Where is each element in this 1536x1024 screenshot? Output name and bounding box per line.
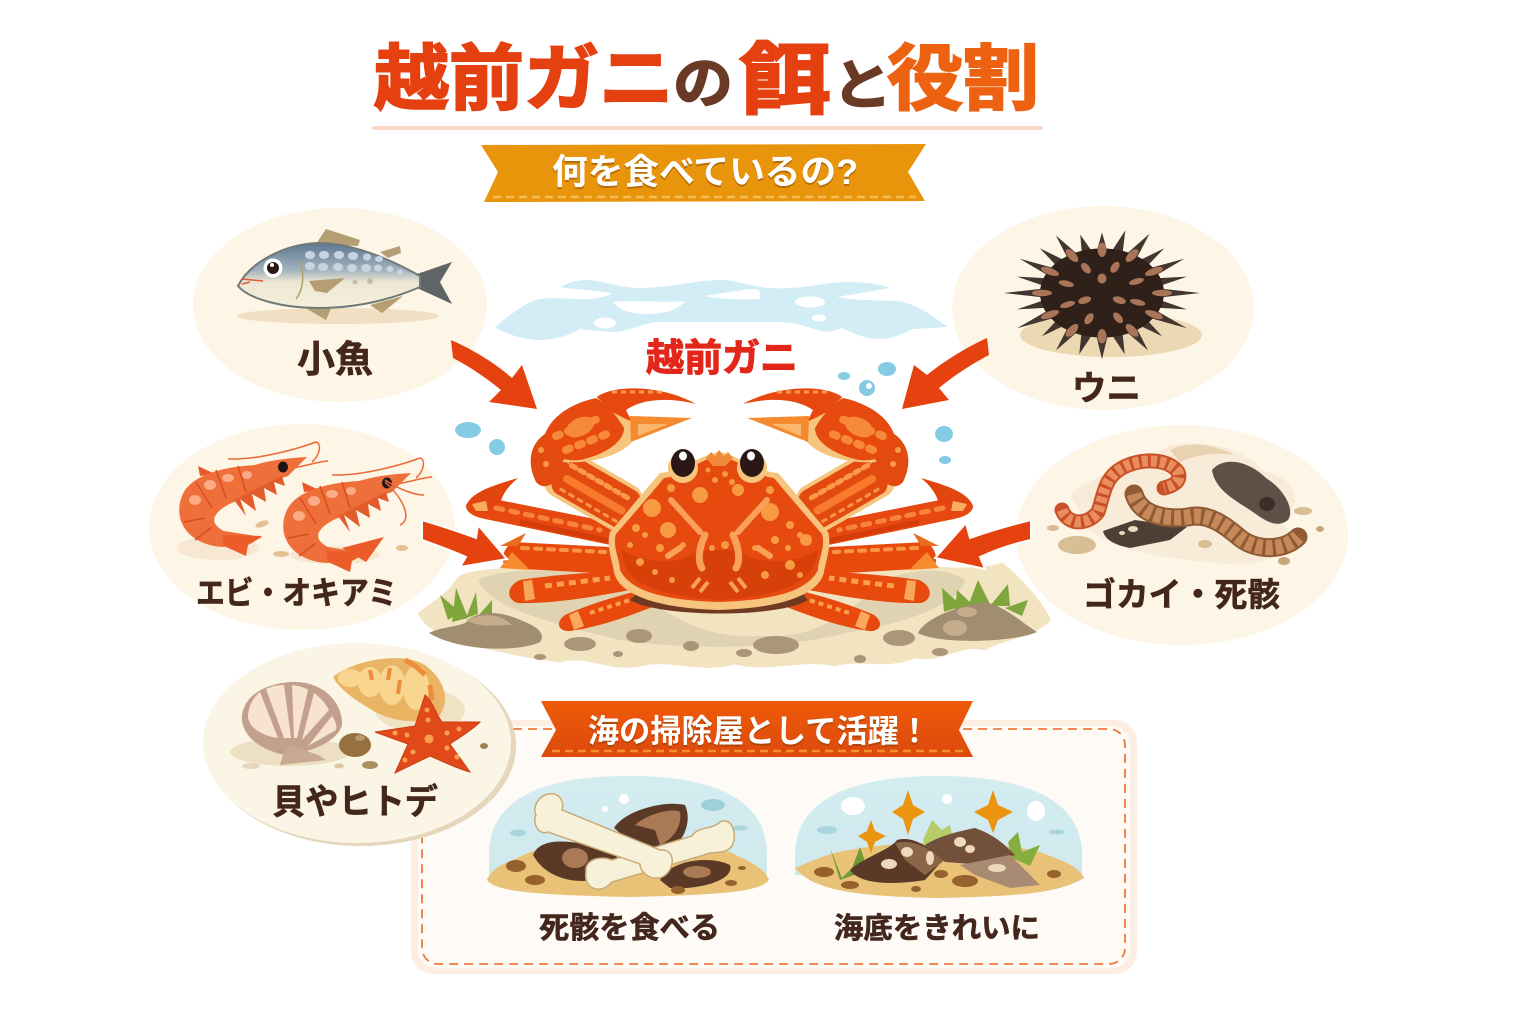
title — [374, 36, 1039, 124]
crab eyes — [668, 449, 767, 483]
ribbon: cleaner of the sea — [541, 701, 973, 757]
title: 役割 — [887, 40, 1039, 120]
panel: shells and starfish — [203, 643, 516, 846]
panel: cleaner role — [411, 701, 1137, 974]
bubbles — [455, 362, 953, 464]
title: 餌 — [739, 36, 831, 124]
label: eats carcasses: 死骸を食べる — [539, 912, 720, 945]
ribbon: what do they eat — [481, 144, 926, 202]
right rock — [918, 602, 1037, 641]
label: sea urchin: ウニ — [1072, 370, 1141, 408]
crab left limbs — [466, 388, 696, 631]
title: の — [673, 52, 733, 115]
icon: shrimp — [177, 442, 432, 572]
panel: shrimp — [149, 424, 455, 630]
icon: shells — [230, 658, 488, 773]
ribbon: what do they eat: 何を食べているの? — [552, 153, 858, 192]
scene: eating carcasses — [487, 776, 769, 897]
crab illustration — [466, 388, 973, 631]
icon: sea urchin — [1004, 229, 1202, 359]
pebbles — [534, 629, 948, 663]
title underline — [372, 126, 1043, 130]
label: shrimp and krill: エビ・オキアミ — [196, 575, 397, 611]
title: と — [832, 56, 892, 116]
ribbon: cleaner of the sea: 海の掃除屋として活躍！ — [588, 713, 930, 749]
crab shell — [609, 449, 829, 614]
title: 越前ガニ — [374, 40, 674, 120]
crab shell markings — [627, 468, 812, 592]
panel: worms and carcasses — [1016, 425, 1348, 645]
panel: fish — [193, 208, 487, 402]
label: cleans the seabed: 海底をきれいに — [834, 912, 1040, 945]
arrow: urchin to crab — [902, 338, 989, 409]
panel: sea urchin — [952, 206, 1254, 410]
icon: fish — [237, 229, 452, 324]
arrow: fish to crab — [451, 340, 537, 409]
label: worms and carcasses: ゴカイ・死骸 — [1083, 576, 1280, 613]
icon: worms — [1047, 443, 1324, 565]
seabed sand — [416, 560, 1053, 669]
arrow: shrimp to crab — [422, 520, 507, 567]
left grass — [440, 588, 492, 622]
label: shells and starfish: 貝やヒトデ — [272, 782, 438, 822]
right grass — [942, 580, 1028, 616]
scene: cleans seabed — [795, 776, 1084, 898]
label: crab name: 越前ガニ — [646, 338, 798, 380]
label: small fish: 小魚 — [297, 339, 373, 380]
water backdrop — [495, 280, 948, 340]
crab right limbs — [743, 388, 973, 631]
left rock — [429, 613, 542, 649]
arrow: worm to crab — [935, 520, 1031, 569]
